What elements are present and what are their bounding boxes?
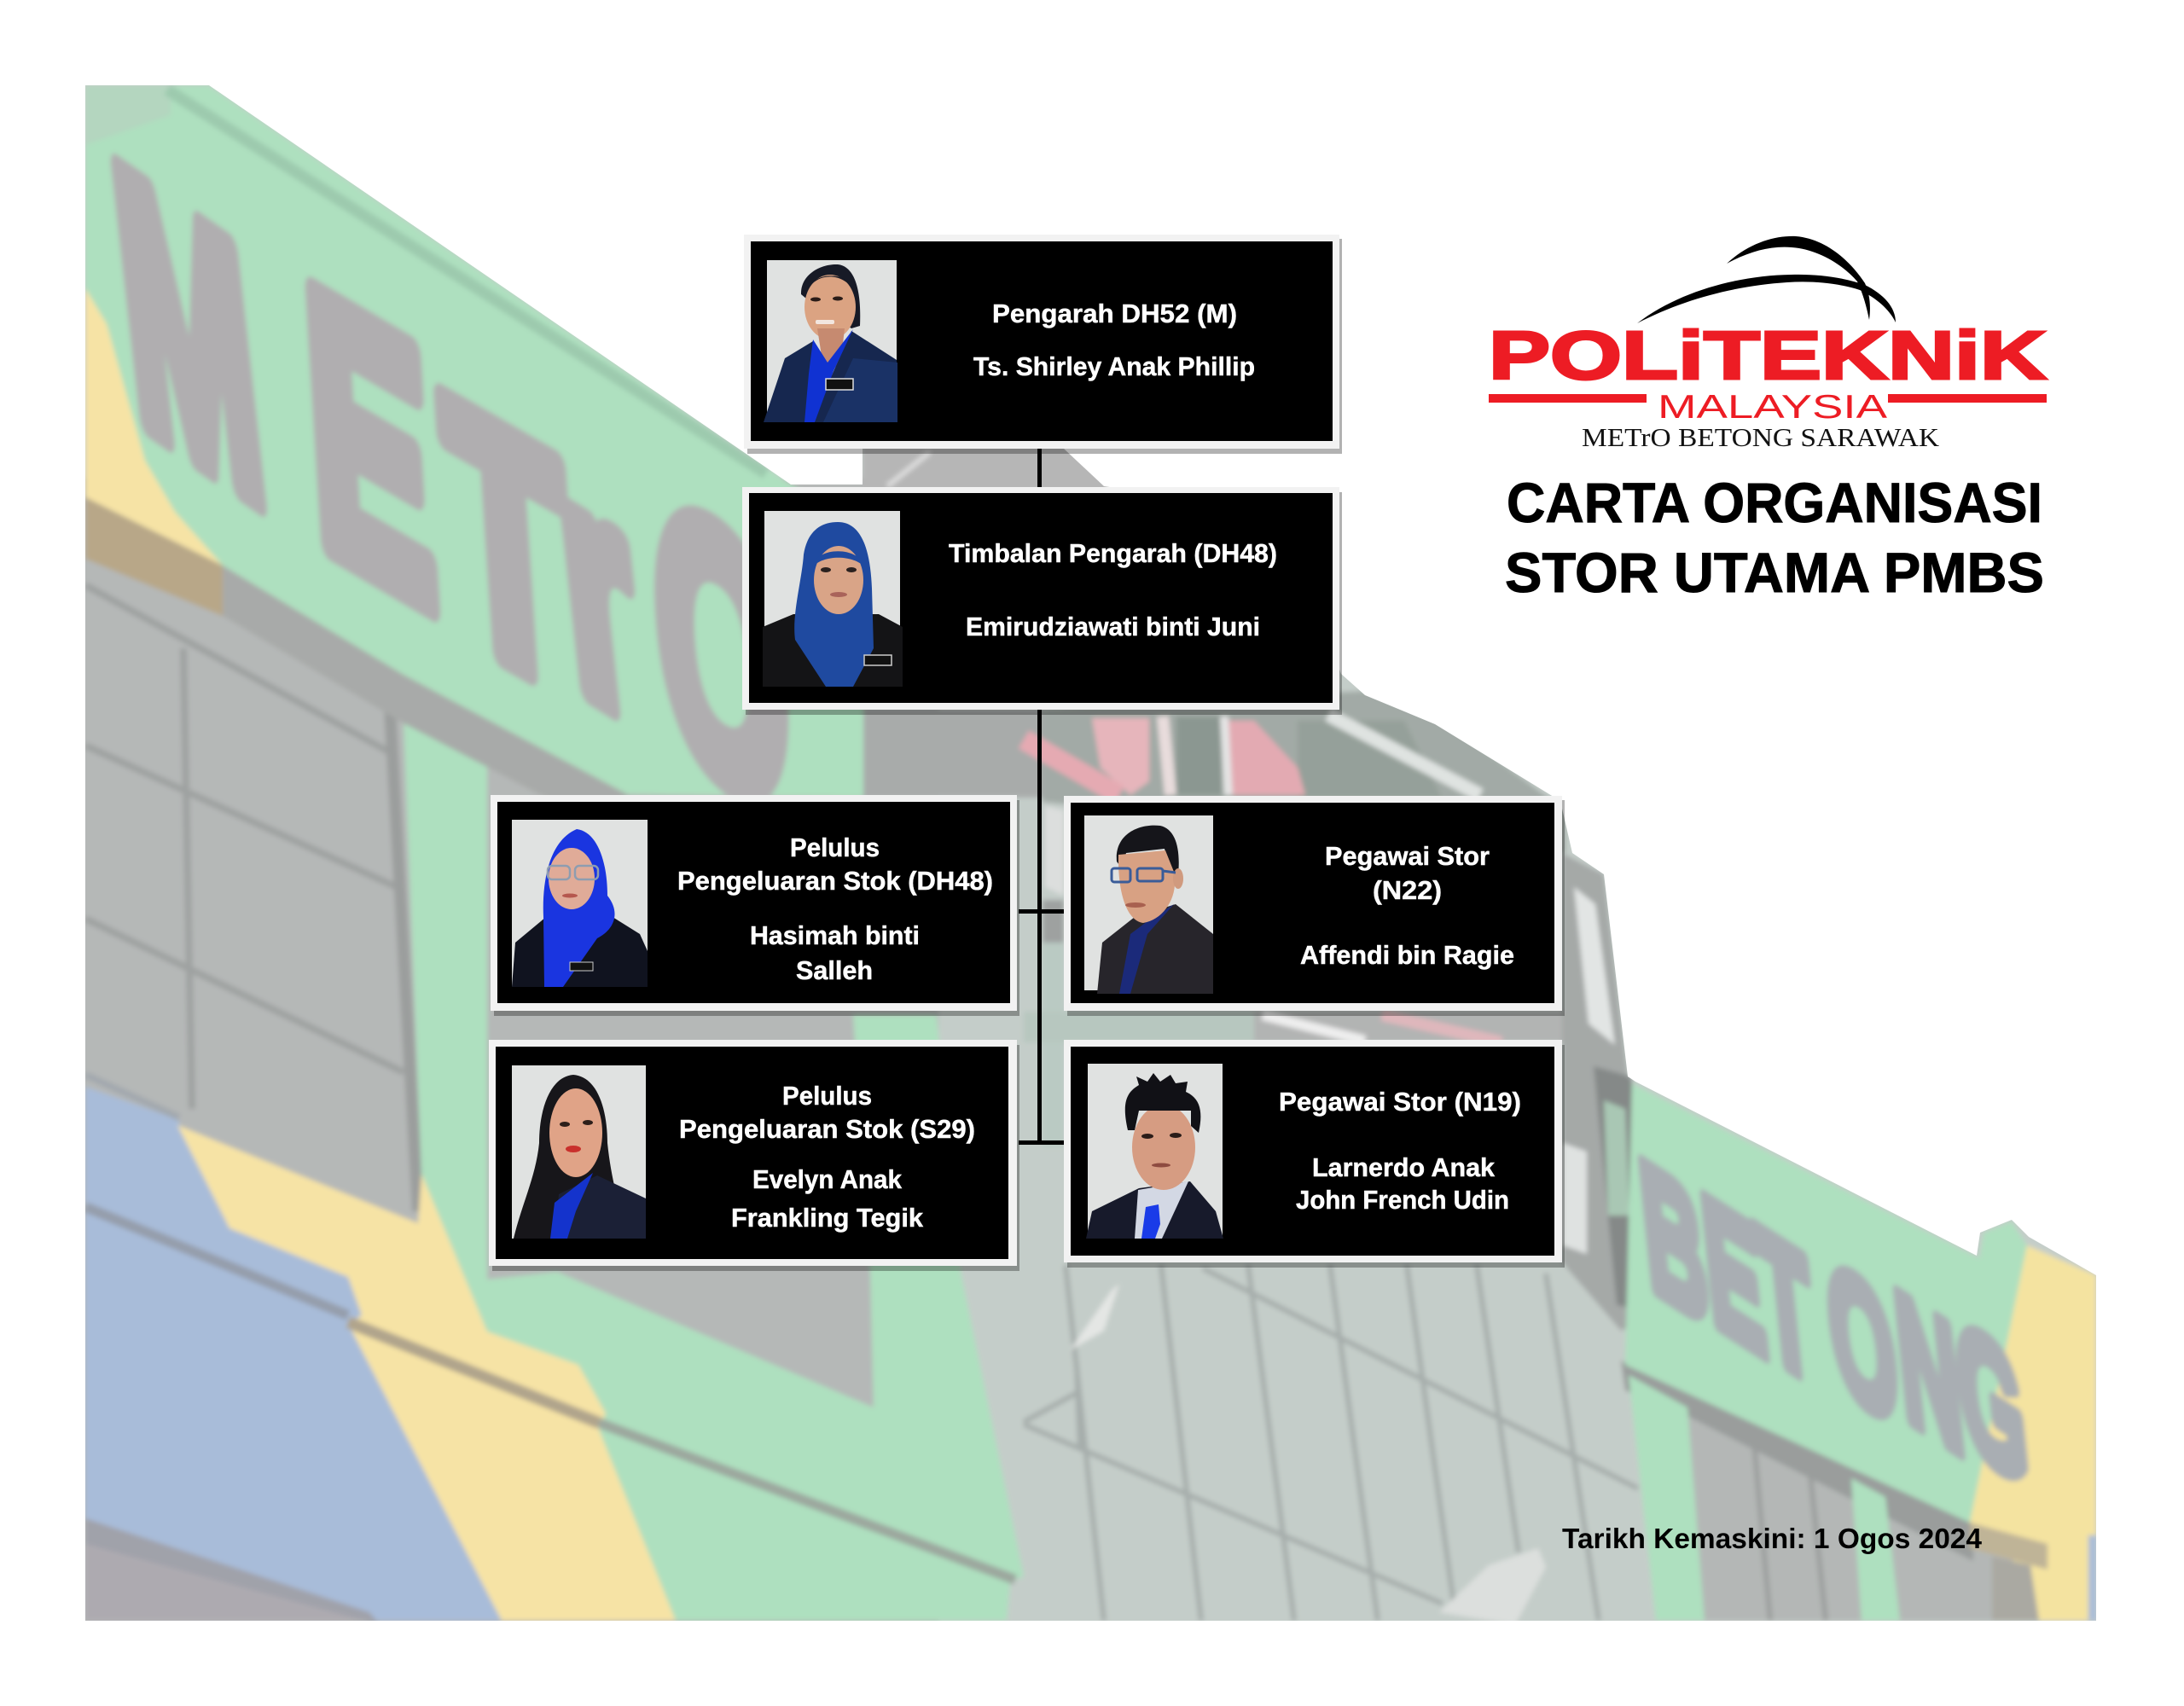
- panel: Timbalan Pengarah: [742, 487, 1342, 715]
- background: faded building photo: T: [1749, 1186, 1823, 1424]
- update date: Tarikh Kemaskini: 1 Ogos 2024: [1562, 1523, 1983, 1554]
- text: Pelulus: Pelulus: [782, 1081, 872, 1111]
- logo: Malaysia: MALAYSIA: [1658, 389, 1887, 426]
- text: Evelyn Anak: Evelyn Anak: [752, 1164, 903, 1194]
- background: faded building photo: E: [1694, 1154, 1774, 1396]
- text: Emirudziawati: Emirudziawati binti Juni: [966, 612, 1260, 641]
- text: (N22): (N22): [1373, 875, 1442, 905]
- text: Pengeluaran Stok (DH48): Pengeluaran Stok (DH48): [677, 866, 993, 896]
- photo: Hasimah: [512, 820, 648, 987]
- background: faded building photo: G: [1947, 1279, 2036, 1526]
- photo: Shirley: [764, 260, 897, 422]
- photo: Evelyn: [512, 1065, 646, 1239]
- background: faded building photo: T: [435, 325, 579, 767]
- photo: Larnerdo: [1086, 1064, 1223, 1239]
- org chart connector lines: [1019, 449, 1064, 1145]
- text: Pengeluaran Stok (S29): Pengeluaran Stok (S29): [679, 1114, 975, 1144]
- text: Frankling Tegik: Frankling Tegik: [731, 1203, 924, 1233]
- panel: Pelulus S29: [489, 1040, 1019, 1271]
- background: faded building photo: M: [99, 85, 279, 586]
- photo: Emirudziawati: [763, 511, 903, 687]
- text: Shirley: Ts. Shirley Anak Phillip: [973, 351, 1255, 381]
- background: faded building photo: E: [296, 209, 444, 688]
- logo: campus name: METrO BETONG SARAWAK: [1582, 422, 1940, 452]
- background: faded building photo: B: [1632, 1120, 1716, 1364]
- text: Pengarah DH52 (M): Pengarah DH52 (M): [992, 299, 1237, 328]
- text: Pelulus: Pelulus: [790, 833, 880, 862]
- text: Timbalan Pengarah (DH48): Timbalan Pengarah (DH48): [949, 538, 1277, 568]
- photo: Affendi: [1084, 815, 1213, 994]
- icon: logo swoosh: [1637, 236, 1896, 323]
- background: faded building photo: O: [643, 416, 800, 893]
- logo wordmark: POLiTEKNiK: [1489, 317, 2047, 393]
- title: STOR UTAMA PMBS: [1505, 541, 2044, 604]
- background: faded building photo: O: [1818, 1219, 1907, 1466]
- text: John French Udin: John French Udin: [1296, 1185, 1509, 1215]
- text: Affendi bin Ragie: Affendi bin Ragie: [1300, 940, 1514, 970]
- title: [1505, 471, 2044, 604]
- text: Pegawai Stor: Pegawai Stor: [1325, 841, 1490, 871]
- text: Larnerdo Anak: Larnerdo Anak: [1312, 1152, 1496, 1182]
- text: Salleh: Salleh: [796, 955, 873, 985]
- panel: Pelulus DH48: [491, 795, 1019, 1016]
- panel: Pegawai Stor N22: [1064, 796, 1565, 1016]
- background: faded building photo: r: [541, 377, 653, 798]
- logo: Politeknik Malaysia: [1489, 236, 2047, 452]
- panel: Pegawai Stor N19: [1064, 1040, 1565, 1268]
- text: Hasimah binti: Hasimah binti: [750, 920, 920, 950]
- text: Pegawai Stor (N19): Pegawai Stor (N19): [1279, 1087, 1521, 1117]
- background: faded building photo: N: [1887, 1250, 1971, 1494]
- title: CARTA ORGANISASI: [1507, 471, 2042, 534]
- panel: Pengarah: [744, 235, 1342, 454]
